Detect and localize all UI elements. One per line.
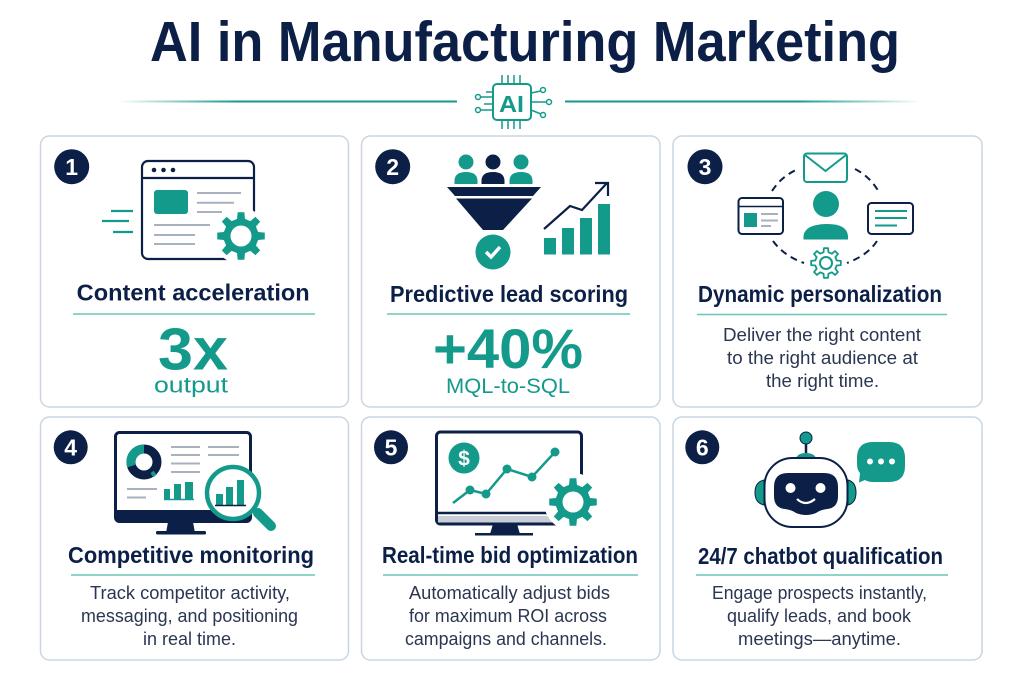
heading: Competitive monitoring (68, 542, 314, 568)
icon: chat bubble (857, 442, 905, 482)
badge 1 (54, 149, 89, 184)
icon: monitor with magnifier (115, 432, 271, 534)
badge 5: 5 (385, 434, 398, 460)
heading: Predictive lead scoring (390, 281, 628, 307)
badge 3: 3 (699, 154, 711, 180)
description: the right time. (766, 370, 879, 391)
badge 1: 1 (65, 154, 78, 180)
stat label: MQL-to-SQL: MQL-to-SQL (446, 375, 570, 398)
description: Track competitor activity, (90, 582, 290, 603)
title: AI in Manufacturing Marketing (150, 10, 900, 74)
icon: browser window with gear (102, 161, 269, 264)
description: for maximum ROI across (409, 605, 607, 626)
icon: lead funnel (447, 154, 541, 270)
badge 6 (685, 430, 719, 464)
badge 4: 4 (64, 434, 77, 460)
icon: personalization hub (738, 154, 913, 278)
panel: real-time bid optimization (362, 417, 660, 660)
stat: +40%: +40% (433, 317, 583, 380)
heading: Real-time bid optimization (382, 542, 638, 568)
icon: AI chip (476, 75, 552, 129)
icon: monitor with chart and gear (436, 432, 602, 536)
description (723, 324, 921, 391)
icon: AI chip: AI (499, 91, 524, 117)
description: qualify leads, and book (727, 605, 912, 626)
heading: Dynamic personalization (698, 281, 942, 307)
description: Deliver the right content (723, 324, 921, 345)
badge 5 (374, 430, 408, 464)
badge 6: 6 (696, 434, 709, 460)
description (81, 582, 298, 649)
description (405, 582, 610, 649)
description: campaigns and channels. (405, 628, 607, 649)
panel: dynamic personalization (673, 136, 982, 407)
badge 2: 2 (386, 154, 399, 180)
description: Automatically adjust bids (409, 582, 610, 603)
heading: Content acceleration (77, 280, 310, 306)
description: meetings—anytime. (738, 628, 901, 649)
panel: 24/7 chatbot qualification (673, 417, 982, 660)
heading: 24/7 chatbot qualification (698, 543, 943, 569)
panel: content acceleration (40, 136, 348, 407)
description (712, 582, 927, 649)
panel: predictive lead scoring (362, 136, 660, 407)
description: to the right audience at (727, 347, 918, 368)
icon: monitor with chart and gear: $ (458, 448, 470, 470)
description: in real time. (143, 628, 236, 649)
badge 4 (54, 430, 88, 464)
badge 3 (688, 149, 722, 184)
stat: 3x: 3x (158, 316, 228, 382)
panel: competitive monitoring (40, 417, 348, 660)
description: messaging, and positioning (81, 605, 298, 626)
icon: robot (755, 432, 856, 527)
header divider with AI chip (118, 75, 921, 129)
badge 2 (375, 149, 410, 184)
icon: growth bar chart (544, 183, 610, 254)
stat label: output: output (154, 373, 229, 398)
description: Engage prospects instantly, (712, 582, 927, 603)
